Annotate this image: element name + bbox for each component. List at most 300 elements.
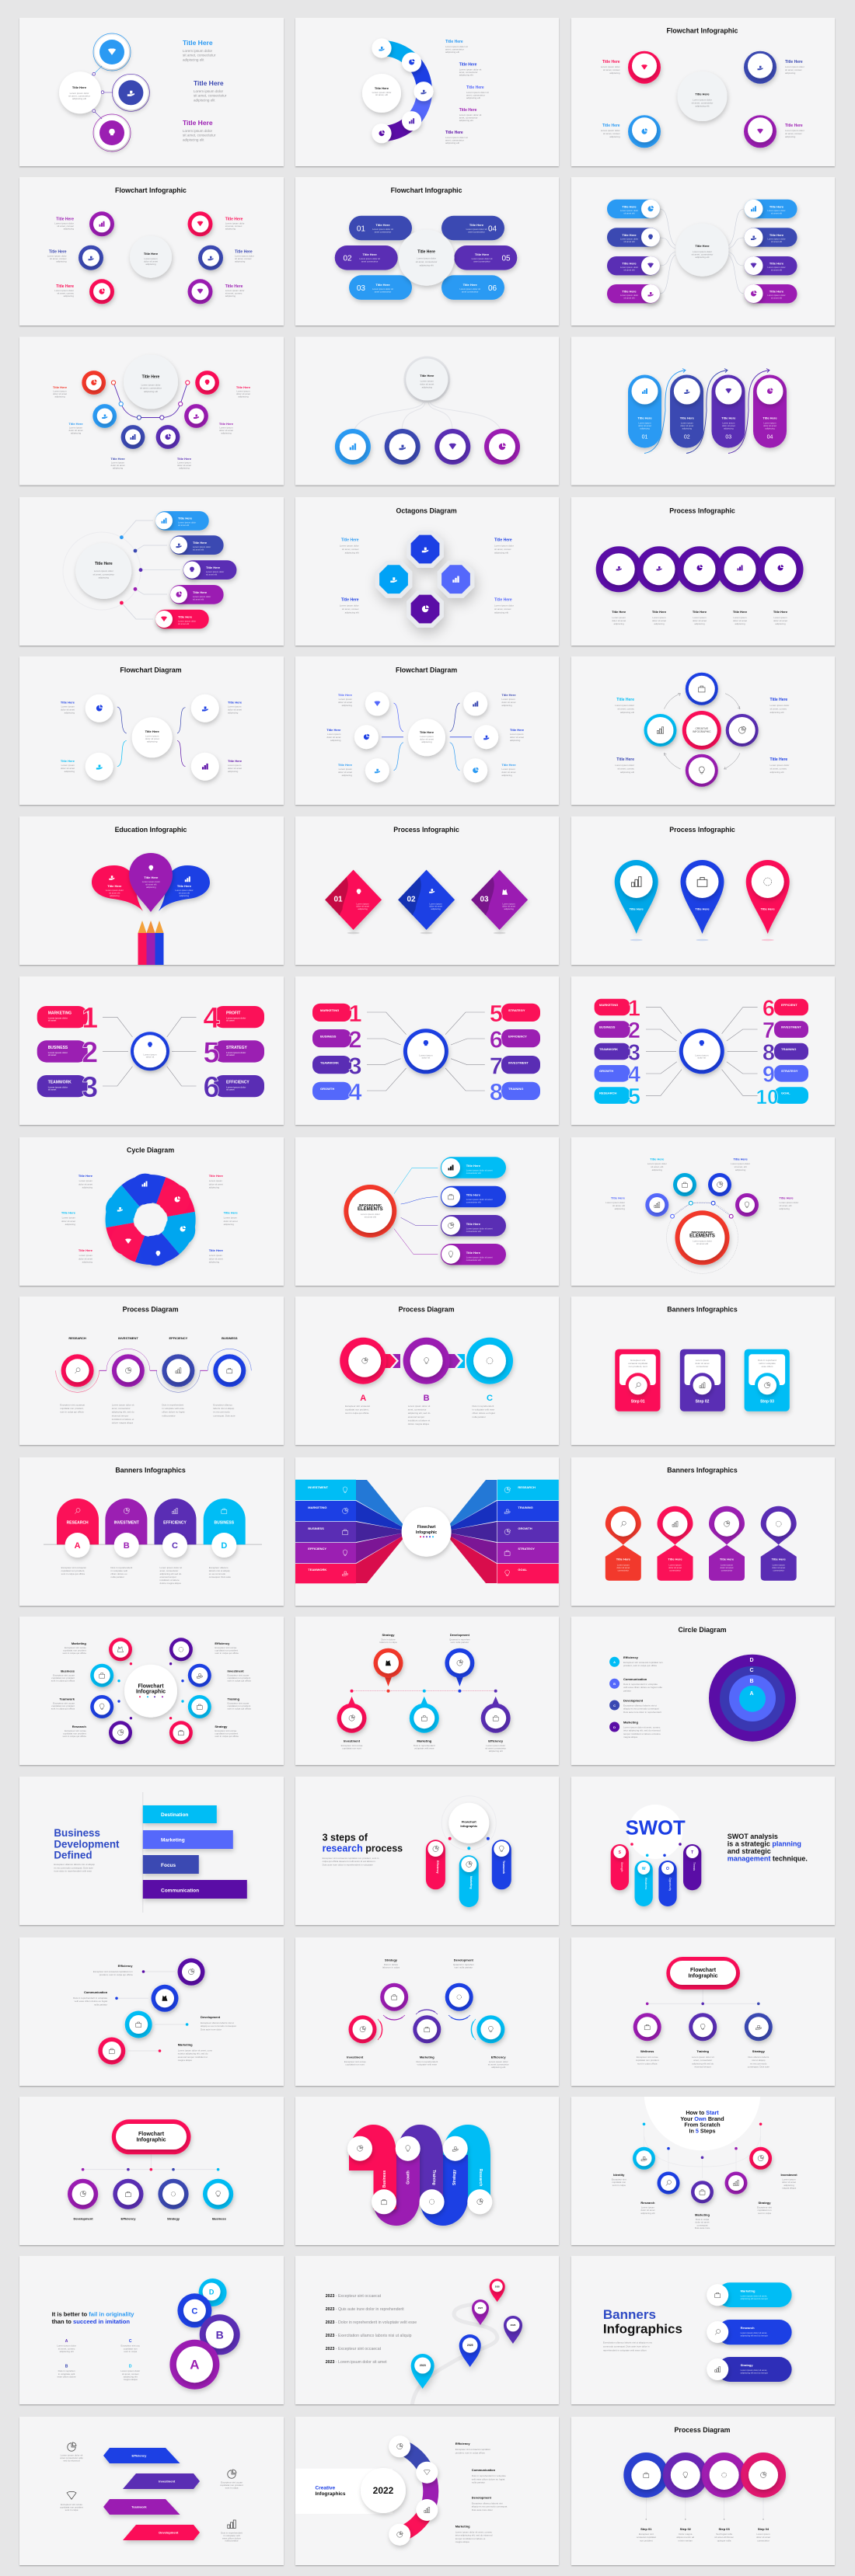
banner 3: TEAMWORK <box>48 1080 72 1084</box>
label marketing: cupidatat non proident <box>63 1649 86 1652</box>
pin 2: Title Here <box>668 1558 682 1561</box>
label 2: Lorem ipsum dolor <box>731 1162 750 1165</box>
label top right: adipiscing <box>785 71 796 75</box>
text efficiency: Lorem ipsum dolor <box>486 1744 505 1747</box>
text 2: amet, consectetur <box>693 2059 712 2062</box>
pin purple: 2026 <box>511 2324 516 2327</box>
center ring: Lorem ipsum <box>695 1053 709 1057</box>
step labels: Title Here <box>652 610 667 614</box>
pill 01: Title Here <box>637 416 652 419</box>
stems <box>646 2494 763 2519</box>
left labels: GROWTH <box>599 1069 613 1073</box>
node: blue <box>93 33 131 71</box>
pill purple: Lorem ipsum dolor sit amet <box>466 1227 493 1231</box>
ring royal <box>148 1982 181 2014</box>
left labels: MARKETING <box>599 1003 618 1007</box>
pill T <box>683 1844 701 1890</box>
panel: flowchart diagram four spheres <box>19 656 284 805</box>
letters: B <box>749 1679 754 1684</box>
diamond 01: 01 <box>333 895 343 903</box>
ring A: A <box>190 2358 200 2372</box>
text block 3: Lorem ipsum dolor sit <box>466 91 489 94</box>
labels mid left: Title Here <box>68 422 83 426</box>
text 1: cupidatat non proident <box>636 2059 659 2062</box>
path dots <box>111 381 190 419</box>
text development: sunt nulla pariatur <box>450 1641 469 1644</box>
ring pink <box>96 2035 128 2067</box>
heading: How to Start <box>686 2109 719 2116</box>
text 2: adipiscing elit sed do <box>692 2062 714 2065</box>
right banners <box>501 1004 540 1100</box>
title: Banners Infographics <box>667 1467 738 1474</box>
body C: in voluptate velit esse <box>473 1408 495 1412</box>
panel: creative infographics 2022 <box>295 2417 559 2565</box>
text D: D <box>129 2365 132 2369</box>
text marketing: tempor incididunt ut labore et <box>455 2537 486 2540</box>
description: SWOT analysis <box>728 1833 778 1840</box>
right labels: INVESTMENT <box>781 1025 801 1029</box>
nodes <box>645 1173 759 1217</box>
panel: arc with five nodes <box>295 18 559 166</box>
text efficiency: Efficiency <box>491 2056 506 2059</box>
line dots <box>350 1690 497 1693</box>
pill purple <box>183 560 236 580</box>
label business: cupidatat non proident <box>51 1676 75 1680</box>
label 4: Lorem ipsum <box>224 1217 237 1220</box>
pill 01: Title Here <box>375 223 390 227</box>
text development: Development <box>472 2495 492 2500</box>
text A: A <box>65 2339 68 2344</box>
text identity: cupidatat non <box>612 2181 626 2184</box>
legend D: tempor incididunt ut labore et dolore <box>623 1732 661 1735</box>
card 1 <box>615 1349 661 1412</box>
label business: Business <box>61 1669 75 1673</box>
left pill text: Title Here <box>622 233 637 237</box>
node 4 <box>203 2179 233 2209</box>
text block 1: Title Here <box>183 39 213 47</box>
ribbon azure <box>443 2125 490 2198</box>
body C: nulla pariatur <box>473 1415 486 1419</box>
step 02: Dolor magna <box>679 2532 693 2536</box>
center sphere: Lorem ipsum dolor <box>372 91 391 94</box>
text block 3: Lorem ipsum dolor <box>183 129 213 133</box>
right labels: GOAL <box>781 1091 790 1095</box>
heading: Banners <box>603 2307 656 2322</box>
left numbers: 5 <box>628 1084 640 1109</box>
label 3: sit amet, consec <box>617 768 634 771</box>
center circle: adipiscing elit <box>695 256 710 259</box>
title: Cycle Diagram <box>127 1146 174 1154</box>
connectors <box>394 1168 438 1255</box>
title: Process Diagram <box>123 1306 179 1314</box>
body B: amet, consectetur <box>408 1408 427 1412</box>
banner 6 <box>203 1071 264 1104</box>
pin pink <box>746 860 790 934</box>
label investment: Excepteur sint occae <box>227 1673 250 1676</box>
center circle: Lorem ipsum dolor <box>693 98 712 101</box>
right numbers: 8 <box>763 1040 775 1065</box>
text marketing: Duis in reprehenderit <box>414 1744 435 1747</box>
labels mid right: dolor sit amet <box>219 429 233 432</box>
label 6: Title Here <box>209 1248 224 1252</box>
step body line 2: dolor sit amet <box>773 619 787 622</box>
pin royal <box>459 2334 481 2367</box>
label 2: Lorem ipsum <box>228 705 242 708</box>
body A: sunt in culpa qui officia <box>345 1412 369 1415</box>
pill magenta: Title Here <box>466 1251 481 1255</box>
label 2: adipiscing <box>228 712 239 715</box>
center circle: adipiscing <box>99 576 109 580</box>
text development: aliquip ex ea commodo consequat <box>472 2505 507 2508</box>
text strategy: laborum in culpa <box>379 1641 397 1644</box>
step body line 2: dolor sit amet <box>733 619 747 622</box>
banner 6: sit amet <box>226 1088 235 1091</box>
pill 02: amet consectetur <box>361 260 378 263</box>
top pill <box>112 2119 191 2154</box>
diamond 02: dolor sit amet <box>429 905 442 908</box>
left labels: BUSINESS <box>599 1025 616 1029</box>
label top left: sit amet, consec <box>342 548 359 551</box>
pill T: T <box>691 1850 693 1855</box>
arch B: B <box>124 1541 130 1551</box>
node 1 <box>633 2013 661 2041</box>
diamond 03: adipiscing <box>504 907 514 910</box>
step 04: Lorem ipsum <box>756 2532 770 2536</box>
label 4: adipiscing <box>224 1223 234 1226</box>
ring azure <box>122 2008 155 2041</box>
label 2: dolor sit amet <box>501 701 516 704</box>
text marketing: dolor sit amet <box>695 2221 710 2224</box>
panel: circle diagram <box>571 1617 835 1765</box>
labels mid right: Lorem ipsum <box>219 426 233 429</box>
label 2: dolor sit amet <box>228 708 242 712</box>
step 04: dolor sit amet <box>756 2536 770 2539</box>
label marketing: sunt in culpa qui officia <box>62 1652 86 1655</box>
step 02: minim veniam <box>679 2539 693 2542</box>
pin shadows <box>630 939 774 941</box>
label 2: Lorem ipsum dolor <box>225 222 245 225</box>
label efficiency: sunt in culpa qui officia <box>215 1652 239 1655</box>
drop pink: Title Here <box>107 884 122 888</box>
label 1: Title Here <box>338 693 353 697</box>
labels bottom left: Lorem ipsum <box>111 461 125 465</box>
diamond 03 <box>471 870 528 930</box>
ring C <box>177 2293 211 2327</box>
label 5: dolor sit amet <box>79 1257 92 1260</box>
step 02: Step 02 <box>680 2527 692 2531</box>
label 6: Lorem ipsum <box>501 768 515 771</box>
pill marketing <box>707 2282 792 2307</box>
label 3: Lorem ipsum dolor <box>47 255 67 258</box>
ring bottom <box>686 754 718 787</box>
pill magenta: Title Here <box>193 590 208 594</box>
bar communication <box>143 1880 247 1899</box>
right numbers: 6 <box>490 1025 503 1053</box>
pin azure: Title Here <box>630 907 644 910</box>
body C: Duis in reprehenderit <box>473 1405 494 1408</box>
pointer dots <box>117 1662 184 1719</box>
text C: sunt in culpa <box>124 2350 137 2353</box>
center sphere <box>124 1665 177 1718</box>
title: Octagons Diagram <box>396 506 457 514</box>
pill 02: 02 <box>343 255 352 263</box>
sphere: Infographic <box>460 1824 478 1828</box>
top circle: Title Here <box>420 374 434 378</box>
pill 04: Title Here <box>763 416 777 419</box>
label 1: sit amet, elit <box>651 1165 663 1168</box>
center sphere: adipiscing <box>147 740 158 743</box>
arch C <box>154 1499 196 1558</box>
banner 3: Lorem ipsum dolor <box>48 1086 68 1089</box>
label marketing: Marketing <box>72 1641 86 1645</box>
diamond 01 <box>325 870 382 930</box>
pill 02: Lorem ipsum <box>681 421 694 424</box>
body 3: in voluptate velit esse <box>162 1407 184 1410</box>
text D: sit amet, consec <box>122 2372 139 2376</box>
text block 2: sit amet, consectetur <box>194 94 227 98</box>
arrow development: Development <box>159 2531 179 2534</box>
title: Banners Infographics <box>115 1467 186 1474</box>
pill indigo <box>170 535 224 555</box>
label 3: sit amet, elit <box>612 1204 625 1207</box>
pill purple: Title Here <box>206 566 221 569</box>
connectors <box>660 209 744 294</box>
body B: Duis in reprehenderit <box>110 1566 132 1569</box>
label 2: Lorem ipsum <box>209 1179 223 1182</box>
right banner labels: INVESTMENT <box>508 1061 529 1064</box>
label bottom right: Lorem ipsum dolor <box>785 129 804 132</box>
pill strategy <box>707 2357 792 2382</box>
labels left: Lorem ipsum <box>53 390 67 393</box>
text research: Research <box>640 2201 655 2205</box>
label bottom right: Lorem ipsum dolor <box>494 604 514 607</box>
step 04: consectetur <box>757 2539 770 2542</box>
left pill text: Title Here <box>622 261 637 266</box>
text communication: Duis in reprehenderit in voluptate <box>472 2474 506 2477</box>
label 1: sit amet, consec <box>57 225 74 228</box>
spheres <box>354 691 498 782</box>
pointer development <box>445 1648 474 1687</box>
icon and text 3 <box>60 2491 83 2512</box>
center ring: Lorem ipsum <box>143 1053 157 1056</box>
icon and text 2 <box>220 2470 243 2489</box>
text A: sit amet, consec <box>58 2347 75 2350</box>
center sphere: adipiscing <box>421 740 432 743</box>
guide arcs and stems <box>644 2124 761 2178</box>
ring A <box>340 1338 386 1384</box>
label 4: dolor sit amet <box>228 767 242 770</box>
label 1: Title Here <box>79 1174 93 1178</box>
pill 03: 03 <box>357 284 365 293</box>
body 2: eiusmod tempor <box>112 1414 128 1417</box>
label 5: adipiscing <box>82 1261 92 1264</box>
right band text: STRATEGY <box>518 1547 535 1551</box>
legend B: Communication <box>623 1677 647 1681</box>
arch B <box>105 1499 147 1558</box>
panel: infographic elements fan <box>571 1137 835 1286</box>
panel: flowchart six nodes <box>19 177 284 325</box>
text block 3: Title Here <box>466 85 484 90</box>
label bottom left: Lorem ipsum dolor <box>340 604 359 607</box>
labels right: Lorem ipsum <box>236 390 250 393</box>
pill 02: 02 <box>684 434 690 440</box>
text block 3: adipiscing elit <box>183 138 204 141</box>
legend D: D <box>613 1725 616 1729</box>
center ring: dolor sit <box>698 1057 706 1060</box>
center sphere: sit amet, elit <box>375 93 388 96</box>
pill 02 <box>670 374 703 447</box>
body A: Excepteur sint occaecat <box>345 1405 370 1408</box>
pill 05: amet consectetur <box>473 260 490 263</box>
panel: numbered pills around center <box>295 177 559 325</box>
panel: pills with curved connectors <box>571 177 835 325</box>
pill indigo: Lorem ipsum dolor <box>193 545 211 548</box>
text block 5: Title Here <box>445 131 463 135</box>
text marketing: tetur adipiscing elit, sed do eiusmod <box>455 2534 493 2537</box>
octagon left <box>375 561 412 598</box>
step body line 1: Lorem ipsum <box>652 616 666 619</box>
step 01: Excepteur sint <box>639 2532 654 2536</box>
timeline path <box>113 382 187 418</box>
label 3: Lorem ipsum <box>61 764 75 767</box>
arch D: D <box>221 1541 227 1551</box>
pill 04 <box>753 374 787 447</box>
pill 01 <box>349 216 412 240</box>
labels: adipiscing <box>65 712 75 715</box>
center circle: sit amet, consectetur <box>692 252 713 256</box>
description: Duis aute irure dolor in reprehenderit in voluptate <box>323 1863 373 1866</box>
right numbers: 8 <box>490 1078 503 1105</box>
right pill text: sit amet elit <box>771 268 782 271</box>
arrow investment <box>123 2473 200 2489</box>
pill purple: consectetur elit <box>466 1230 481 1233</box>
heading: research <box>323 1843 363 1854</box>
panel: staggered rings <box>19 1937 284 2086</box>
body C: cillum dolore eu fugiat <box>473 1412 495 1415</box>
letters: D <box>749 1658 754 1663</box>
text strategy: Duis in dolore <box>384 1963 399 1966</box>
panel: slanted arrows <box>19 2417 284 2565</box>
text block 3: sit amet, consectetur <box>183 134 216 138</box>
pill blue: Title Here <box>466 1193 481 1196</box>
step labels: Title Here <box>693 610 707 614</box>
text 3: Duis ullamco laboris <box>748 2056 770 2059</box>
center sphere: Lorem ipsum <box>420 735 434 738</box>
label business: sunt in culpa qui officia <box>51 1680 75 1683</box>
banner 1: 1 <box>82 1002 98 1035</box>
right labels: EFFICIENT <box>781 1003 797 1007</box>
labels left: adipiscing <box>54 395 65 398</box>
linked rings <box>623 2452 786 2498</box>
panel: SWOT <box>571 1777 835 1925</box>
body B: dolore magna aliqua <box>408 1422 429 1426</box>
card 1: Step 01 <box>631 1400 645 1405</box>
left folds <box>356 1480 404 1583</box>
pill 03 <box>712 374 745 447</box>
label top left: Title Here <box>341 538 359 542</box>
ring D: D <box>209 2289 215 2296</box>
panel: banners with step cards <box>571 1297 835 1445</box>
text efficiency: Efficiency <box>455 2442 470 2445</box>
label 3: adipiscing elit <box>620 771 634 774</box>
center circle <box>676 224 729 277</box>
label bottom right: sit amet, consec <box>785 132 802 135</box>
column labels: INVESTMENT <box>118 1336 138 1340</box>
drop pink: sit amet elit <box>109 891 120 894</box>
label 1: Lorem ipsum <box>339 698 352 701</box>
description: and strategic <box>728 1847 771 1855</box>
pill magenta <box>170 585 224 604</box>
pill O <box>658 1861 677 1906</box>
pin blue <box>681 860 724 934</box>
label bottom left: sit amet, consec <box>603 132 620 135</box>
label 5: Title Here <box>338 763 353 767</box>
label bottom right: sit amet, consec <box>494 607 511 611</box>
title: Education Infographic <box>115 826 187 834</box>
main ring: INFOGRAPHIC <box>692 1230 714 1234</box>
pill 01: adipiscing <box>640 426 650 430</box>
body B: adipiscing elit, sed do <box>408 1412 431 1415</box>
dots <box>643 2122 762 2159</box>
step body line 2: dolor sit amet <box>612 619 626 622</box>
label 5: Lorem ipsum <box>339 768 352 771</box>
banner 4: sit amet <box>226 1019 235 1022</box>
heading: Defined <box>54 1849 92 1861</box>
label 3: Lorem ipsum <box>62 1217 75 1220</box>
heading: process <box>363 1843 403 1854</box>
panel: banners with arches <box>19 1457 284 1606</box>
pill research: adipiscing elit sed do tempor <box>741 2334 768 2338</box>
left numbers: 4 <box>348 1078 362 1105</box>
bar focus <box>143 1855 199 1874</box>
center sphere: Flowchart <box>417 1525 435 1530</box>
labels bottom right: Lorem ipsum <box>177 461 191 465</box>
nodes ring <box>79 211 223 304</box>
diamond 01: Lorem ipsum <box>357 902 369 905</box>
pill efficiency: Efficiency <box>436 1861 439 1874</box>
pill 01: Lorem ipsum dolor sit <box>372 228 393 231</box>
text investment: Lorem ipsum <box>782 2178 796 2181</box>
text marketing: eiusmod tempor incididunt ut <box>178 2056 208 2059</box>
right numbers: 9 <box>763 1063 775 1088</box>
left band text: INVESTMENT <box>308 1485 329 1489</box>
labels bottom left: adipiscing <box>113 466 124 469</box>
pill 02: dolor sit amet <box>680 424 693 427</box>
left banner labels: BUSINESS <box>320 1035 337 1038</box>
pill strategy: Lorem ipsum dolor sit amet, <box>741 2369 767 2372</box>
five rings <box>596 546 804 592</box>
text strategy: Excepteur sint <box>757 2206 772 2209</box>
step body line 3: adipiscing <box>775 622 786 625</box>
text communication: nulla pariatur <box>94 2003 107 2006</box>
card 2: Step 02 <box>696 1400 710 1405</box>
center circle: Lorem ipsum dolor <box>94 569 113 573</box>
banner 2: Lorem ipsum dolor <box>48 1051 68 1054</box>
label 5: dolor sit amet <box>338 771 352 774</box>
center sphere <box>408 719 445 756</box>
title: Flowchart Infographic <box>667 27 738 35</box>
description: Exercitation ullamco laboris nisi ut aliquip ex ea <box>603 2341 652 2345</box>
diamond 02 <box>398 870 455 930</box>
pin azure <box>411 2354 434 2389</box>
right band text: GROWTH <box>518 1526 532 1530</box>
left numbers: 2 <box>628 1018 640 1043</box>
pill blue: consectetur elit <box>466 1200 481 1203</box>
center circle: adipiscing elit <box>72 97 86 100</box>
body 2: adipiscing elit, sed do <box>112 1411 134 1414</box>
octagon bottom <box>407 590 444 628</box>
dots <box>82 2168 219 2170</box>
